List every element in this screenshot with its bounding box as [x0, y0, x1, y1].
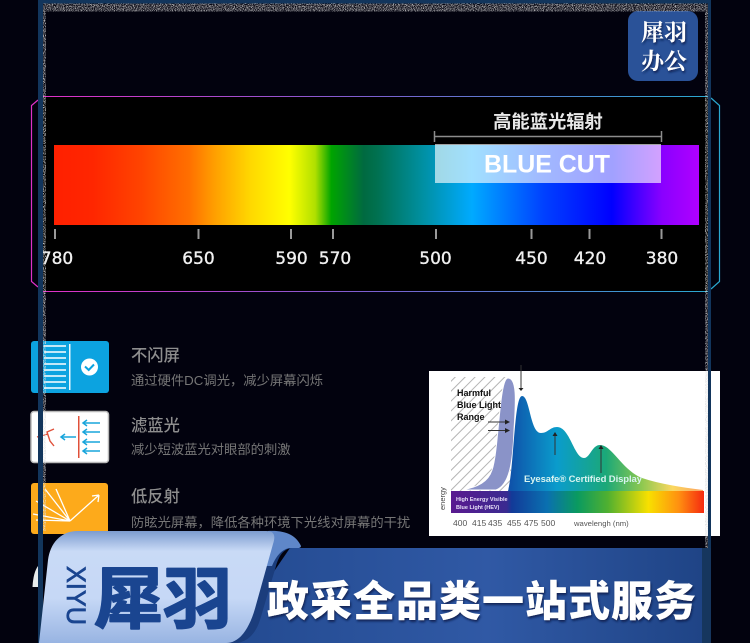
chart arrows [488, 365, 601, 473]
wavelength labels: 450 [515, 249, 548, 269]
chart: eyesafe blue light spectrum: 415 [472, 518, 486, 528]
icon: blue light filter [31, 412, 108, 462]
brand latin: XIYU [61, 566, 91, 625]
text: no flicker: 不闪屏 [131, 347, 180, 365]
blue cut overlay [435, 144, 661, 183]
hatched harmful range [451, 377, 511, 491]
wavelength labels: 780 [41, 249, 73, 269]
hev label: High Energy Visible [456, 497, 508, 503]
chart: eyesafe blue light spectrum: wavelengh (nm) [573, 519, 629, 528]
text: blue light filter: 滤蓝光 [131, 417, 180, 435]
wavelength labels [41, 249, 678, 269]
high energy blue light label [434, 111, 662, 142]
logo badge [628, 11, 698, 81]
harmful label: Range [457, 412, 485, 422]
wavelength labels: 500 [419, 249, 452, 269]
wavelength labels: 570 [319, 249, 351, 269]
chart: eyesafe blue light spectrum: 500 [541, 518, 555, 528]
banner fold top [266, 531, 301, 566]
logo badge: 办公 [641, 43, 687, 76]
text: blue light filter: 减少短波蓝光对眼部的刺激 [131, 442, 291, 457]
wavelength labels: 420 [574, 249, 606, 269]
harmful light peak [462, 378, 515, 490]
hev label [456, 497, 508, 511]
white arc fragment [32, 566, 38, 587]
text: no flicker: 通过硬件DC调光，减少屏幕闪烁 [131, 373, 323, 388]
text: low reflection: 低反射 [131, 488, 180, 506]
chart: eyesafe blue light spectrum: 400 [453, 518, 467, 528]
spectrum panel [32, 96, 720, 292]
chart: eyesafe blue light spectrum: 475 [524, 518, 538, 528]
eyesafe label: Eyesafe® Certified Display [524, 474, 643, 485]
banner light tab [39, 531, 274, 643]
hev label: Blue Light (HEV) [456, 505, 500, 511]
chart spectrum bar [451, 491, 704, 513]
blue cut overlay: BLUE CUT [484, 150, 610, 178]
wavelength ticks [54, 229, 662, 239]
banner [39, 531, 711, 643]
chart: eyesafe blue light spectrum: 455 [507, 518, 521, 528]
wavelength labels: 590 [275, 249, 308, 269]
banner slogan: 政采全品类一站式服务 [267, 568, 696, 629]
harmful label [457, 388, 501, 422]
banner fold shadow [222, 548, 292, 643]
high energy blue light label: 高能蓝光辐射 [493, 111, 603, 132]
certified display curve [508, 396, 703, 491]
text: low reflection: 防眩光屏幕，降低各种环境下光线对屏幕的干扰 [131, 515, 410, 530]
icon: low reflection [31, 483, 108, 534]
spectrum bar [54, 145, 699, 225]
wavelength labels: 380 [646, 249, 678, 269]
harmful label: Blue Light [457, 400, 501, 410]
logo badge: 犀羽 [641, 14, 687, 47]
brand name: 犀羽 [94, 544, 232, 643]
harmful label: Harmful [457, 388, 491, 398]
text: blue light filter [131, 417, 291, 457]
chart: eyesafe blue light spectrum [429, 365, 720, 536]
axis labels: energy [438, 487, 447, 510]
wavelength labels: 650 [182, 249, 215, 269]
chart: eyesafe blue light spectrum: 435 [488, 518, 502, 528]
text: no flicker [131, 347, 323, 388]
text: low reflection [131, 488, 410, 530]
icon: no flicker [31, 341, 109, 393]
banner band [225, 548, 702, 643]
